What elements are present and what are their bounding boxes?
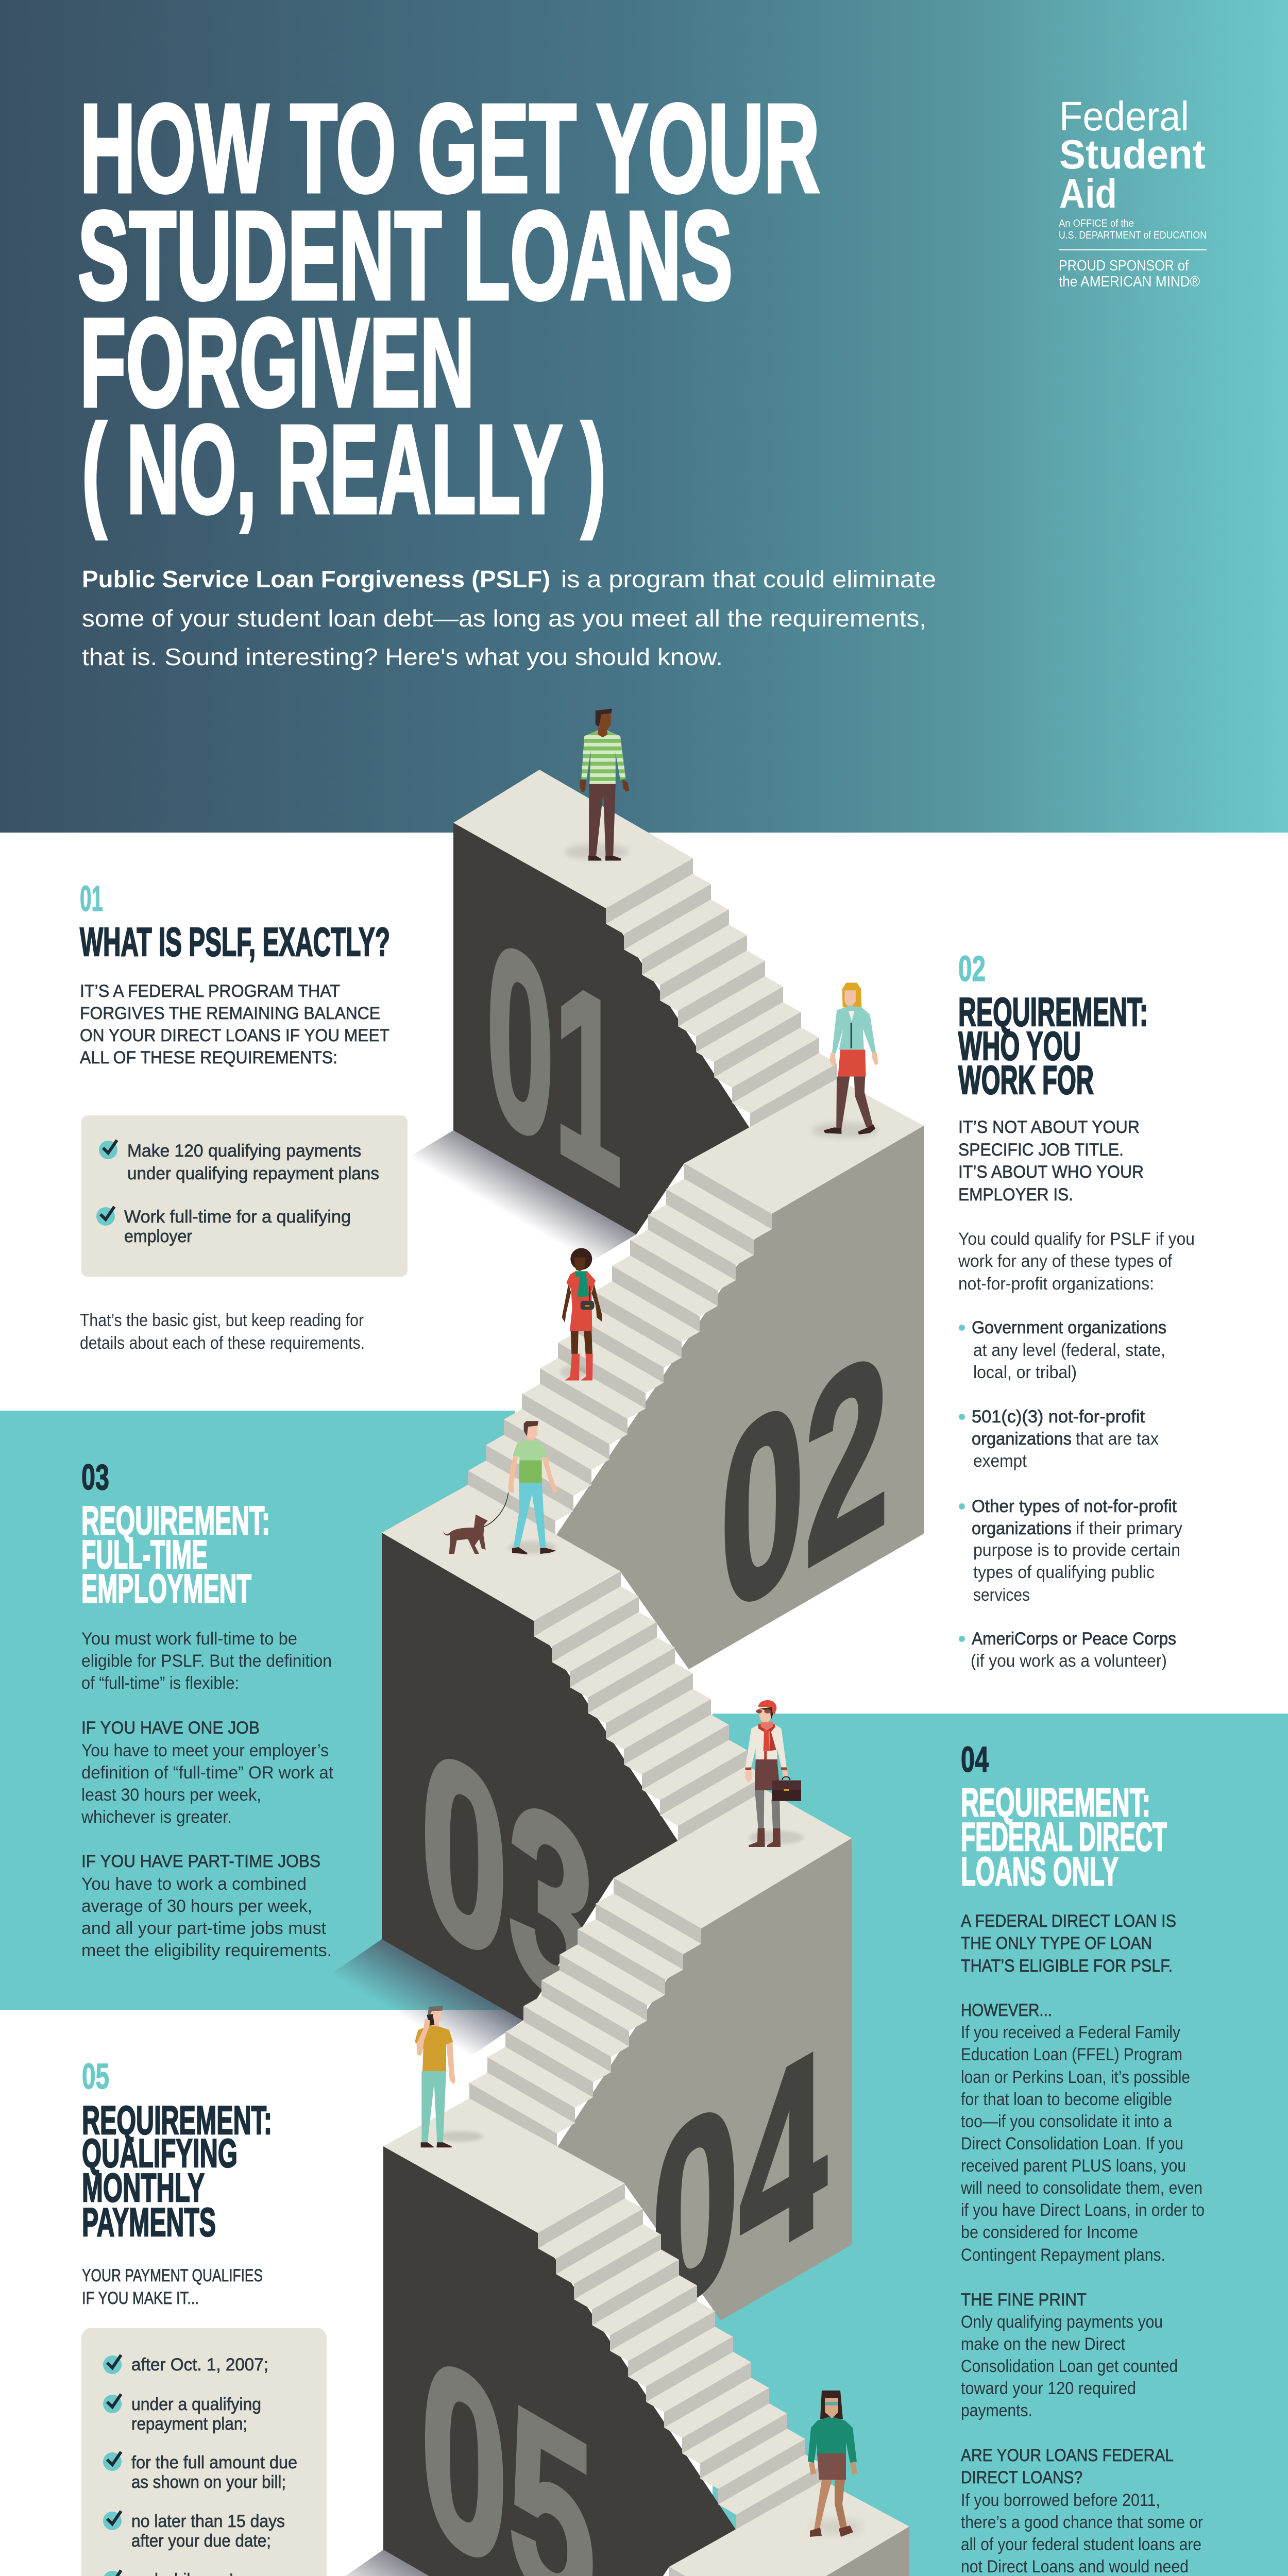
- lead text 01: FORGIVES THE REMAINING BALANCE: [80, 1004, 380, 1023]
- bullet list of organizations: AmeriCorps or Peace Corps: [972, 1629, 1176, 1649]
- bullet list of organizations: purpose is to provide certain: [973, 1540, 1180, 1560]
- title: HOW TO GET YOUR: [80, 78, 820, 218]
- landing 3: [382, 1485, 620, 1621]
- payment checklist box: for the full amount due: [131, 2453, 297, 2472]
- lead text 02: EMPLOYER IS.: [958, 1185, 1073, 1205]
- body text 03: [81, 1629, 334, 1960]
- block 02 grey face: [555, 1126, 924, 1669]
- payment checklist box: as shown on your bill;: [131, 2472, 286, 2492]
- landing 2: [684, 1079, 924, 1214]
- lead text 02: IT’S NOT ABOUT YOUR: [958, 1117, 1140, 1137]
- bullet list of organizations: types of qualifying public: [973, 1563, 1155, 1582]
- person: woman in red dress: [560, 1248, 602, 1380]
- body text 04: not Direct Loans and would need: [961, 2557, 1189, 2576]
- body text 03: whichever is greater.: [81, 1807, 232, 1827]
- bullet list of organizations: that are tax: [1076, 1429, 1159, 1449]
- landing 1: [453, 770, 693, 908]
- body text 03: eligible for PSLF. But the definition: [81, 1651, 332, 1671]
- intro paragraph: that is. Sound interesting? Here's what you should know.: [82, 643, 723, 670]
- title: [78, 78, 820, 539]
- body text 03: of “full-time” is flexible:: [81, 1673, 239, 1693]
- lead text 05: YOUR PAYMENT QUALIFIES: [82, 2266, 263, 2285]
- numeral 02: 02: [720, 1294, 889, 1670]
- heading 04: REQUIREMENT:: [961, 1780, 1150, 1825]
- bullet list of organizations: exempt: [973, 1451, 1027, 1471]
- body text 04: ARE YOUR LOANS FEDERAL: [961, 2446, 1174, 2465]
- section 05: 05: [82, 2056, 109, 2096]
- checklist box: [81, 1115, 408, 1277]
- block 03 dark face: [382, 1533, 678, 2021]
- body text 04: for that loan to become eligible: [961, 2090, 1172, 2109]
- title: ( NO, REALLY ): [82, 399, 606, 539]
- person: man on phone: [415, 2006, 483, 2147]
- bullet list of organizations: 501(c)(3) not-for-profit: [972, 1407, 1145, 1427]
- payment checklist box: [81, 2328, 327, 2576]
- body text 04: there’s a good chance that some or: [961, 2513, 1203, 2532]
- lead text 02: not-for-profit organizations:: [958, 1274, 1154, 1294]
- title: FORGIVEN: [80, 292, 474, 433]
- body text 04: be considered for Income: [961, 2223, 1138, 2242]
- staircase illustration: [367, 770, 985, 2576]
- section 04: [960, 1739, 1205, 2576]
- stair flight 6: [435, 2567, 757, 2576]
- body text 03: least 30 hours per week,: [81, 1785, 261, 1805]
- lead text 05: [82, 2266, 263, 2308]
- body text 04: toward your 120 required: [961, 2379, 1136, 2398]
- bullet list of organizations: local, or tribal): [973, 1363, 1077, 1382]
- closing note 01: details about each of these requirements.: [80, 1333, 365, 1353]
- section 03: 03: [81, 1457, 109, 1497]
- closing note 01: That’s the basic gist, but keep reading for: [80, 1311, 364, 1330]
- intro paragraph: some of your student loan debt—as long as you meet all the requirements,: [82, 605, 926, 632]
- lead text 05: IF YOU MAKE IT...: [82, 2289, 199, 2308]
- staircase illustration: 01: [486, 883, 622, 1240]
- person: woman in red hat with briefcase: [745, 1700, 804, 1847]
- body text 04: loan or Perkins Loan, it’s possible: [961, 2067, 1190, 2087]
- body text 04: will need to consolidate them, even: [960, 2178, 1202, 2198]
- body text 04: THE FINE PRINT: [961, 2290, 1087, 2310]
- body text 03: IF YOU HAVE ONE JOB: [81, 1718, 260, 1738]
- heading 05: [82, 2097, 272, 2245]
- teal panel: section 04: [713, 1714, 1288, 2576]
- body text 04: payments.: [961, 2401, 1032, 2420]
- heading 03: FULL-TIME: [81, 1532, 208, 1577]
- bullet list of organizations: [959, 1318, 1182, 1671]
- payment checklist box: after your due date;: [131, 2531, 271, 2551]
- Federal Student Aid logo: An OFFICE of the: [1059, 218, 1134, 229]
- landing 5: [383, 2098, 624, 2233]
- numeral 04: 04: [651, 1992, 828, 2373]
- heading 05: QUALIFYING: [82, 2130, 238, 2176]
- body text 03: You have to work a combined: [81, 1874, 307, 1894]
- lead text 01: IT’S A FEDERAL PROGRAM THAT: [80, 981, 340, 1001]
- heading 03: REQUIREMENT:: [81, 1498, 270, 1543]
- landing 6: [669, 2480, 909, 2576]
- body text 04: all of your federal student loans are: [961, 2535, 1201, 2554]
- section 02: 02: [958, 948, 986, 989]
- section 01: 01: [80, 878, 103, 919]
- closing note 01: [80, 1311, 365, 1353]
- payment checklist box: no later than 15 days: [131, 2512, 285, 2531]
- intro paragraph: [82, 566, 936, 670]
- bullet list of organizations: services: [973, 1585, 1030, 1605]
- body text 04: received parent PLUS loans, you: [961, 2156, 1186, 2176]
- Federal Student Aid logo: Student: [1059, 131, 1206, 177]
- payment checklist box: repayment plan;: [131, 2414, 247, 2434]
- body text 04: too—if you consolidate it into a: [961, 2112, 1172, 2131]
- body text 04: Consolidation Loan get counted: [961, 2357, 1178, 2376]
- Federal Student Aid logo: the AMERICAN MIND®: [1059, 274, 1200, 290]
- section 02: [958, 948, 1195, 1671]
- stair flight 4: [451, 1878, 701, 2159]
- heading 05: REQUIREMENT:: [82, 2097, 272, 2143]
- checklist box: under qualifying repayment plans: [127, 1164, 379, 1183]
- person: woman in green jacket: [808, 2391, 863, 2537]
- intro paragraph: Public Service Loan Forgiveness (PSLF): [82, 566, 550, 592]
- heading 02: WORK FOR: [958, 1057, 1094, 1103]
- lead text 02: work for any of these types of: [958, 1251, 1173, 1271]
- body text 03: You must work full-time to be: [81, 1629, 297, 1649]
- heading 02: WHO YOU: [958, 1023, 1081, 1069]
- bullet list of organizations: Other types of not-for-profit: [972, 1497, 1177, 1516]
- block 05 dark face: [383, 2146, 736, 2576]
- lead text 01: ALL OF THESE REQUIREMENTS:: [80, 1048, 337, 1067]
- body text 04: Education Loan (FFEL) Program: [961, 2045, 1182, 2064]
- teal panel: section 03: [0, 1411, 515, 2010]
- stair flight 5: [538, 2183, 841, 2540]
- body text 04: If you borrowed before 2011,: [961, 2490, 1160, 2510]
- heading 02: REQUIREMENT:: [958, 989, 1148, 1035]
- intro paragraph: is a program that could eliminate: [561, 566, 936, 592]
- body text 04: A FEDERAL DIRECT LOAN IS: [961, 1911, 1176, 1931]
- bullet list of organizations: if their primary: [1076, 1519, 1182, 1538]
- lead text 02: You could qualify for PSLF if you: [958, 1229, 1195, 1249]
- heading 03: EMPLOYMENT: [81, 1566, 251, 1611]
- lead text 01: [80, 981, 389, 1067]
- numeral 03: 03: [420, 1690, 596, 2070]
- lead text 02: IT’S ABOUT WHO YOUR: [958, 1162, 1144, 1182]
- body text 03: and all your part-time jobs must: [81, 1919, 327, 1938]
- body text 04: THE ONLY TYPE OF LOAN: [961, 1934, 1152, 1953]
- body text 03: You have to meet your employer’s: [81, 1741, 329, 1760]
- section 01: [80, 878, 408, 1353]
- heading 04: [961, 1780, 1167, 1894]
- shadows under dark blocks: [280, 1130, 897, 2576]
- bullet list of organizations: organizations: [972, 1519, 1072, 1538]
- section 03: [81, 1457, 334, 1960]
- block 04 grey face: [555, 1838, 852, 2320]
- title: STUDENT LOANS: [78, 185, 733, 326]
- Federal Student Aid logo: PROUD SPONSOR of: [1059, 258, 1189, 274]
- bullet list of organizations: Government organizations: [972, 1318, 1166, 1337]
- body text 03: IF YOU HAVE PART-TIME JOBS: [81, 1852, 320, 1871]
- payment checklist box: under a qualifying: [131, 2395, 261, 2414]
- lead text 01: ON YOUR DIRECT LOANS IF YOU MEET: [80, 1026, 389, 1045]
- block 01 dark face: [453, 823, 750, 1234]
- bullet list of organizations: organizations: [972, 1429, 1072, 1449]
- lead text 02: SPECIFIC JOB TITLE.: [958, 1140, 1124, 1160]
- bullet list of organizations: at any level (federal, state,: [973, 1341, 1165, 1360]
- heading 03: [81, 1498, 270, 1611]
- person: man walking dog: [443, 1421, 558, 1554]
- person: man in striped shirt: [565, 708, 629, 860]
- bullet list of organizations: (if you work as a volunteer): [971, 1651, 1167, 1671]
- Federal Student Aid logo: Federal: [1059, 93, 1189, 139]
- body text 04: make on the new Direct: [961, 2334, 1125, 2354]
- landing 4: [614, 1790, 852, 1929]
- Federal Student Aid logo: U.S. DEPARTMENT of EDUCATION: [1059, 230, 1207, 241]
- lead text 02: [958, 1117, 1195, 1294]
- body text 04: Direct Consolidation Loan. If you: [961, 2134, 1183, 2154]
- heading 02: [958, 989, 1148, 1103]
- header gradient band: [0, 0, 1288, 833]
- block 06 grey face: [540, 2527, 909, 2576]
- body text 03: definition of “full-time” OR work at: [81, 1763, 334, 1783]
- heading 04: LOANS ONLY: [961, 1849, 1118, 1894]
- person: blonde woman: [812, 982, 878, 1138]
- body text 04: if you have Direct Loans, in order to: [961, 2200, 1205, 2220]
- section 05: [81, 2056, 327, 2576]
- body text 03: average of 30 hours per week,: [81, 1896, 312, 1916]
- body text 04: [960, 1911, 1205, 2576]
- body text 03: meet the eligibility requirements.: [81, 1941, 332, 1960]
- payment checklist box: after Oct. 1, 2007;: [131, 2355, 268, 2375]
- body text 04: HOWEVER...: [961, 2001, 1052, 2020]
- checklist box: employer: [124, 1227, 192, 1246]
- section 04: 04: [961, 1739, 989, 1780]
- dog: [443, 1514, 488, 1554]
- heading 05: MONTHLY: [82, 2165, 205, 2210]
- Federal Student Aid logo: Aid: [1059, 171, 1117, 216]
- heading 01: WHAT IS PSLF, EXACTLY?: [80, 919, 390, 964]
- body text 04: Only qualifying payments you: [961, 2312, 1163, 2332]
- checklist box: Make 120 qualifying payments: [127, 1141, 361, 1161]
- body text 04: If you received a Federal Family: [961, 2023, 1180, 2042]
- stair flight 1: [606, 858, 855, 1139]
- body text 04: Contingent Repayment plans.: [961, 2245, 1165, 2265]
- body text 04: DIRECT LOANS?: [961, 2468, 1082, 2487]
- checklist box: Work full-time for a qualifying: [124, 1207, 351, 1227]
- heading 05: PAYMENTS: [82, 2199, 216, 2245]
- stair flight 3: [534, 1571, 783, 1852]
- body text 04: THAT’S ELIGIBLE FOR PSLF.: [961, 1956, 1173, 1976]
- Federal Student Aid logo: [1059, 93, 1207, 290]
- stair flight 2: [450, 1163, 772, 1547]
